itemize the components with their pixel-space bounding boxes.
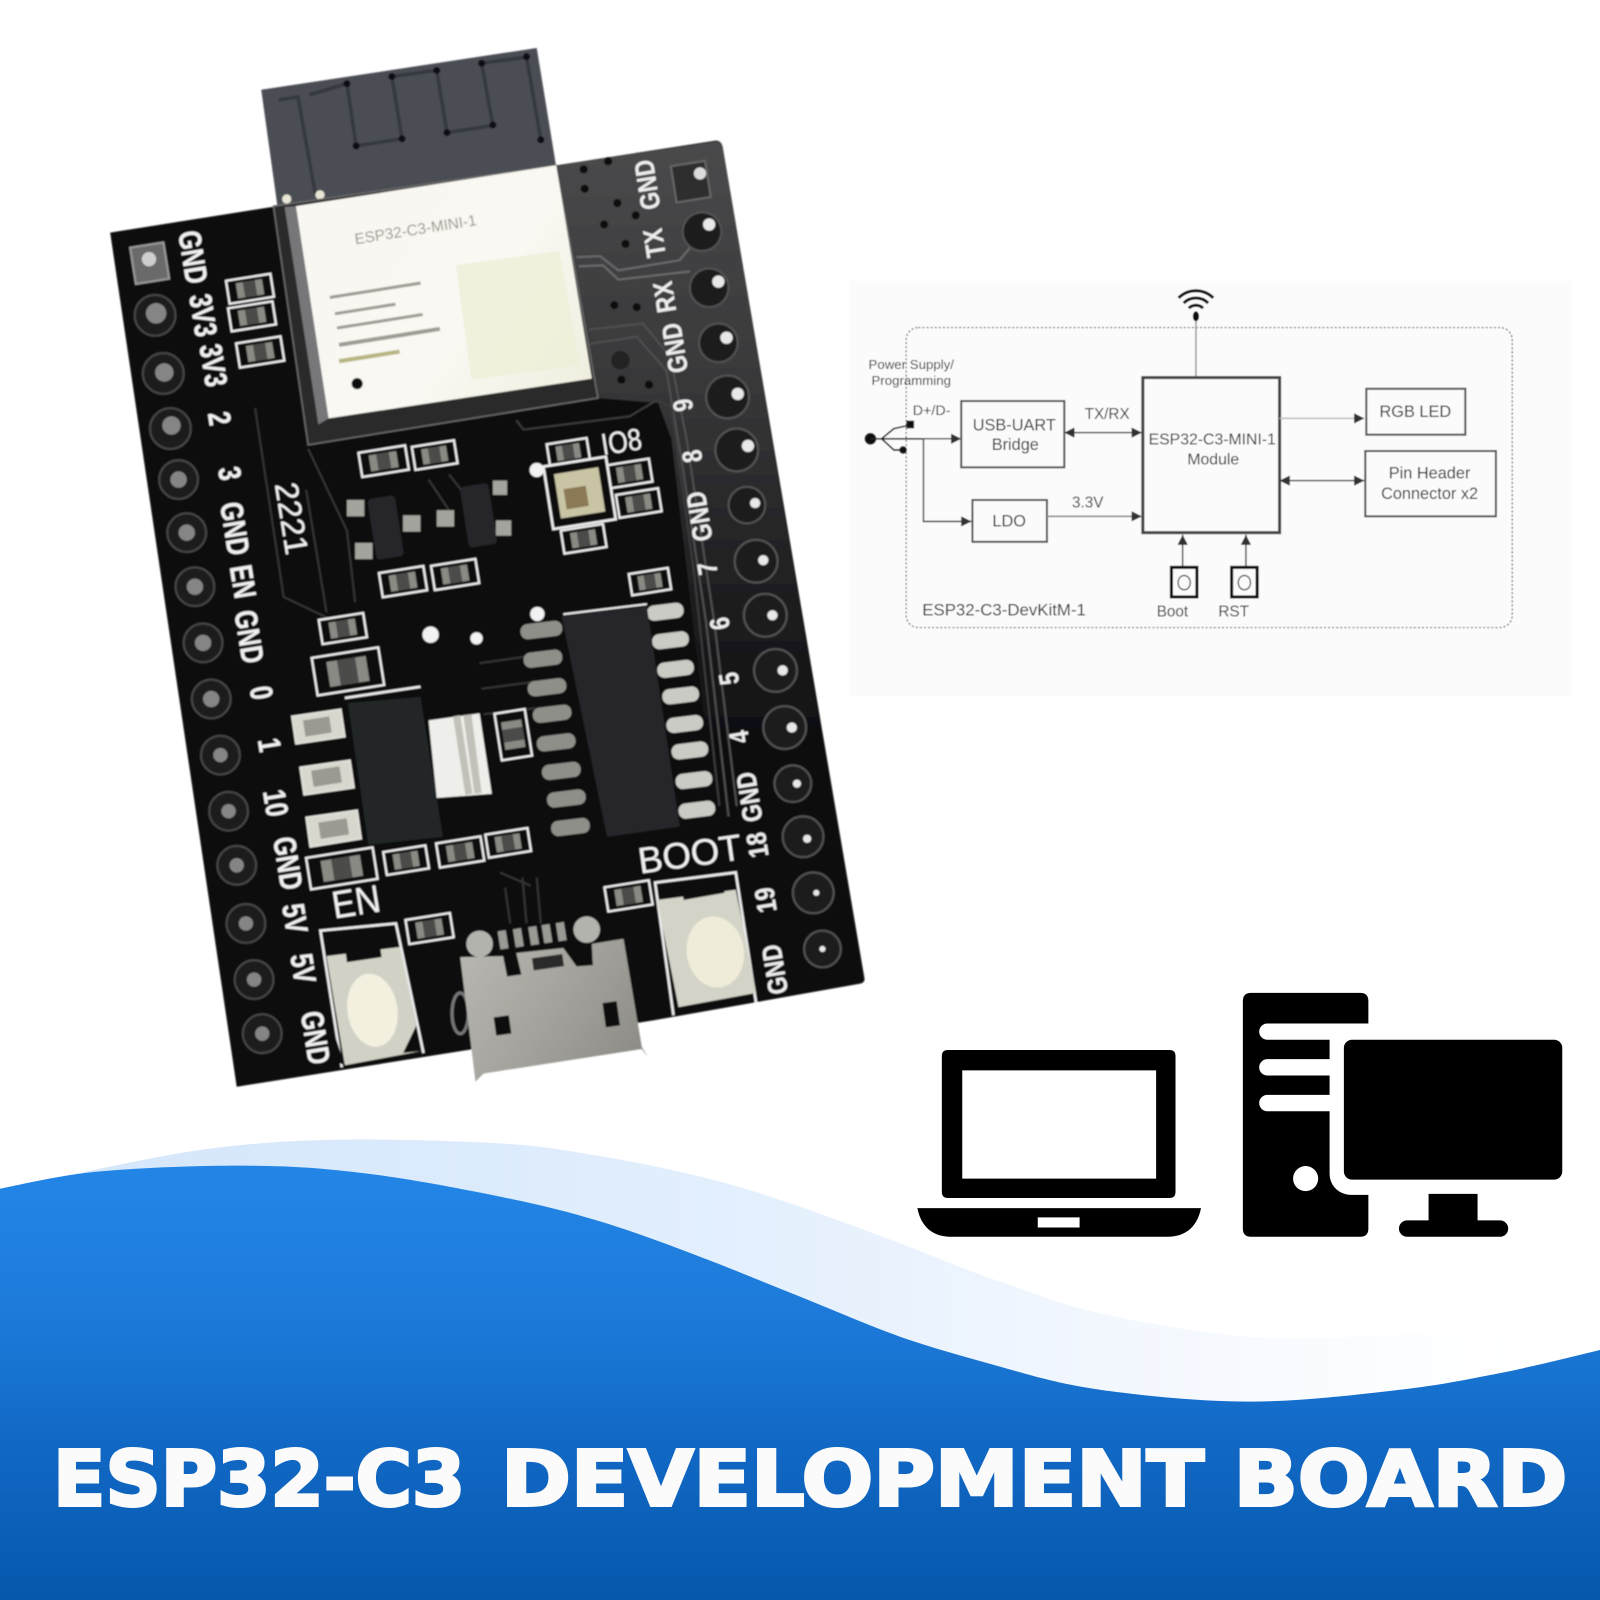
panel background [849, 281, 1571, 696]
title: DEVELOPMENT [501, 1436, 1204, 1525]
icon: laptop [917, 1050, 1201, 1237]
board markings: EN [329, 877, 383, 927]
silkscreen pin labels left: GND [228, 608, 270, 666]
module vias [580, 157, 653, 389]
stand [1429, 1194, 1478, 1224]
silkscreen pin labels right: GND [756, 942, 795, 997]
SOP16 USB-UART chip [520, 602, 716, 837]
power button [1293, 1166, 1318, 1191]
PCB traces [516, 248, 737, 816]
title: BOARD [1234, 1436, 1567, 1525]
blue wave background [0, 1140, 1600, 1600]
micro-USB connector [452, 916, 648, 1082]
board markings: IO8 [599, 422, 644, 462]
silkscreen pin labels right: TX [638, 226, 672, 260]
silkscreen pin labels left: 0 [243, 684, 280, 702]
castellated pins left [130, 242, 282, 1053]
silkscreen pin labels right: 7 [692, 560, 724, 577]
D+/D- label: D+/D- [913, 403, 951, 419]
silkscreen pin labels right: 19 [749, 885, 783, 915]
silkscreen pin labels left: 5V [284, 951, 323, 986]
foot [1399, 1220, 1508, 1237]
silkscreen pin labels left: 10 [256, 787, 295, 819]
RST button [1218, 567, 1257, 621]
pin header box: Connector x2 [1381, 485, 1478, 503]
silkscreen pin labels left: EN [223, 562, 263, 601]
ESP32-C3-MINI-1 module box: Module [1187, 452, 1239, 469]
board markings: BOOT [635, 827, 744, 882]
silkscreen pin labels right [629, 158, 795, 997]
board markings [268, 422, 744, 927]
pin header box [1365, 451, 1496, 516]
RGB LED box: RGB LED [1379, 403, 1451, 421]
LDO box: LDO [992, 512, 1026, 530]
wifi icon [1179, 291, 1213, 378]
silkscreen pin labels right: GND [656, 321, 695, 375]
board name label: ESP32-C3-DevKitM-1 [922, 601, 1086, 620]
silkscreen pin labels left: GND [213, 499, 256, 558]
USB-UART bridge box: Bridge [992, 436, 1039, 454]
small SMD components [226, 274, 671, 944]
grey upper-right PCB area [557, 142, 832, 806]
ESP32-C3-MINI-1 module box: ESP32-C3-MINI-1 [1149, 431, 1276, 448]
3.3V label: 3.3V [1072, 495, 1104, 512]
silkscreen pin labels left [171, 228, 337, 1067]
silkscreen pin labels left: 5V [275, 901, 314, 936]
tower [1243, 993, 1368, 1237]
connection arrows [923, 413, 1364, 566]
silkscreen pin labels right: GND [731, 770, 769, 824]
silkscreen pin labels right: 18 [741, 830, 775, 860]
silkscreen pin labels left: 3 [211, 464, 248, 483]
board holes and white dots [422, 463, 544, 644]
silkscreen pin labels left: 1 [251, 736, 288, 754]
icon: desktop computer [1243, 993, 1562, 1237]
LDO box [972, 500, 1047, 542]
pale back wave [61, 1140, 1600, 1429]
castellated pins right [671, 161, 841, 967]
board markings: 2221 [268, 480, 316, 557]
ESP32-C3-MINI-1 module box [1143, 378, 1280, 533]
module label: ESP32-C3-MINI-1 [353, 212, 478, 248]
development board photo [110, 48, 864, 1087]
USB symbol [865, 421, 923, 453]
silkscreen pin labels right: GND [629, 158, 667, 212]
BOOT push button [655, 872, 756, 1015]
ESP32-C3-MINI-1 module [273, 165, 598, 445]
EN push button [320, 923, 423, 1067]
main blue wave [0, 1166, 1600, 1600]
RGB LED [543, 457, 616, 529]
power supply label: Power Supply/ [869, 357, 954, 372]
monitor [1344, 1040, 1562, 1180]
silkscreen pin labels left: 3V3 [182, 291, 224, 339]
block diagram panel [849, 281, 1571, 696]
silkscreen pin labels right: RX [648, 279, 683, 315]
Boot button [1157, 567, 1197, 621]
silkscreen pin labels left: 3V3 [193, 341, 234, 389]
silkscreen pin labels left: GND [266, 834, 309, 892]
power supply label [869, 357, 954, 388]
title: ESP32-C3 [53, 1436, 465, 1525]
silkscreen pin labels right: 8 [677, 448, 709, 465]
silkscreen pin labels right: 5 [713, 670, 746, 687]
RGB LED box [1366, 389, 1465, 435]
SOT23 transistors [347, 481, 511, 560]
silkscreen pin labels right: GND [681, 489, 719, 544]
TX/RX label: TX/RX [1085, 406, 1130, 423]
silkscreen pin labels left: GND [294, 1009, 337, 1067]
PCB body [110, 141, 864, 1087]
silkscreen pin labels right: 6 [704, 615, 737, 632]
USB-UART bridge box: USB-UART [973, 417, 1056, 435]
dashed board outline [906, 328, 1512, 628]
RST button: RST [1218, 604, 1249, 621]
silkscreen pin labels left: GND [171, 228, 214, 286]
antenna section [261, 48, 556, 207]
pin header box: Pin Header [1389, 464, 1471, 482]
voltage regulator [292, 687, 492, 847]
Boot button: Boot [1157, 604, 1189, 621]
power supply label: Programming [871, 373, 951, 388]
silkscreen pin labels right: 9 [668, 397, 700, 414]
silkscreen pin labels right: 4 [724, 728, 756, 745]
USB-UART bridge box [961, 401, 1064, 467]
silkscreen pin labels left: 2 [201, 409, 238, 428]
title [53, 1436, 1567, 1525]
